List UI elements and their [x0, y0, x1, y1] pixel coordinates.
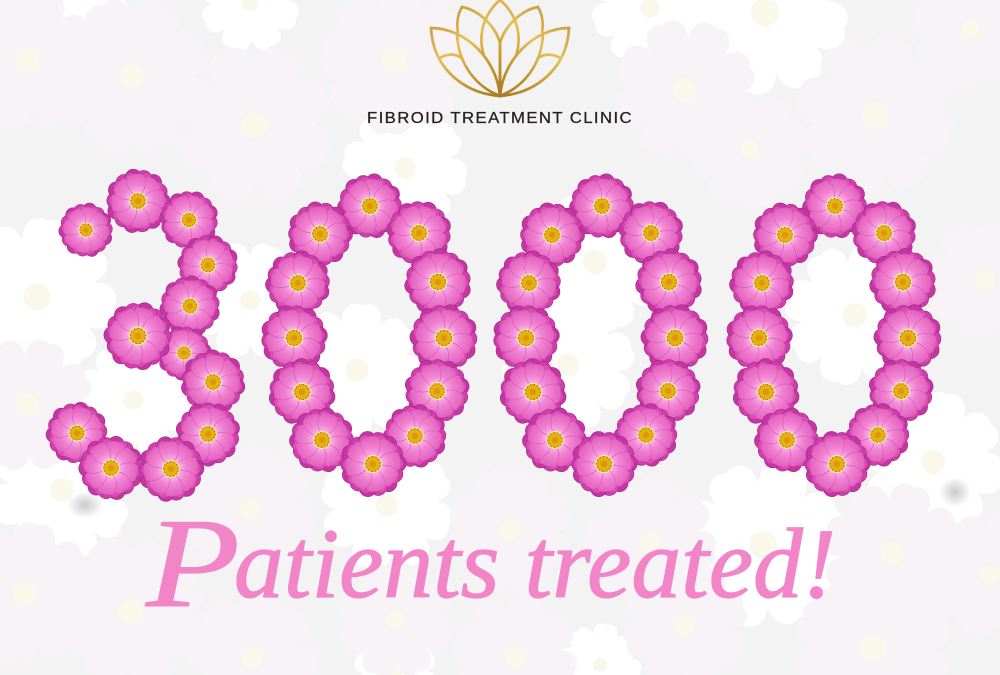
digit 3 made of flowers: [34, 155, 259, 516]
digit 0 (first) made of flowers: [246, 168, 487, 512]
clinic name: FIBROID TREATMENT CLINIC: [367, 110, 633, 127]
logo: gold lotus: [431, 0, 569, 96]
headline: Patients treated!: P: [145, 492, 240, 634]
digit 0 (third) made of flowers: [711, 168, 951, 512]
digit 0 (second) made of flowers: [478, 168, 718, 512]
headline: Patients treated!: [145, 492, 836, 634]
headline: Patients treated!: atients treated!: [234, 508, 836, 619]
